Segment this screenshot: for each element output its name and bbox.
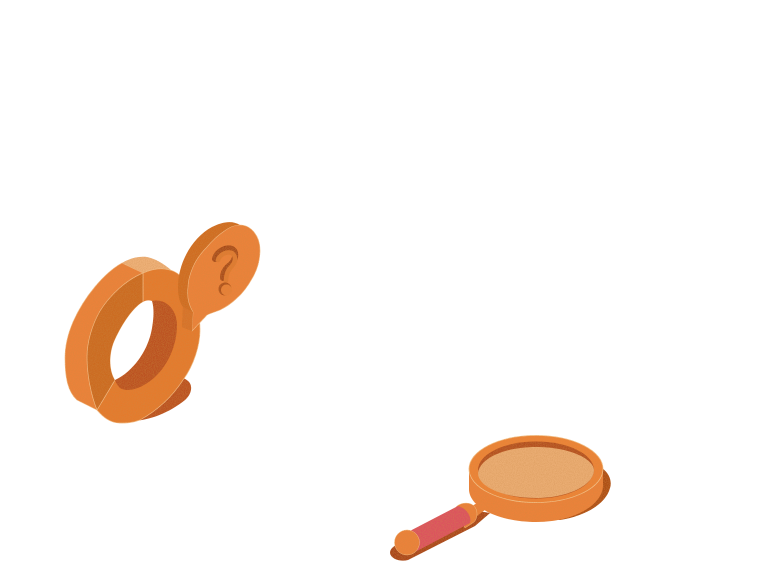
bubble back wall [178,222,240,331]
question mark dot [218,282,232,296]
bubble front [188,225,260,331]
question mark shadow [215,248,235,278]
lens inner dark edge [478,442,594,498]
lens top rim [469,436,603,502]
handle neck [472,498,491,516]
lens ground shadow [520,468,611,520]
lens side wall [469,468,603,522]
handle collar [456,503,477,528]
question mark glyph [218,252,235,281]
donut front darker segment [87,273,143,410]
icon: magnifying glass [390,436,611,561]
icon: donut chart with question bubble [65,222,260,423]
donut top light wall [122,257,171,273]
donut inner wall [115,301,177,390]
handle ground shadow [390,510,490,561]
handle grip [406,506,470,551]
donut ground shadow [97,377,191,421]
bubble tail edge [182,307,193,331]
donut front lighter segment [97,269,200,423]
donut outer side wall [65,263,143,410]
handle end cap [394,530,420,555]
donut hole [110,300,154,380]
lens glass [478,447,594,498]
